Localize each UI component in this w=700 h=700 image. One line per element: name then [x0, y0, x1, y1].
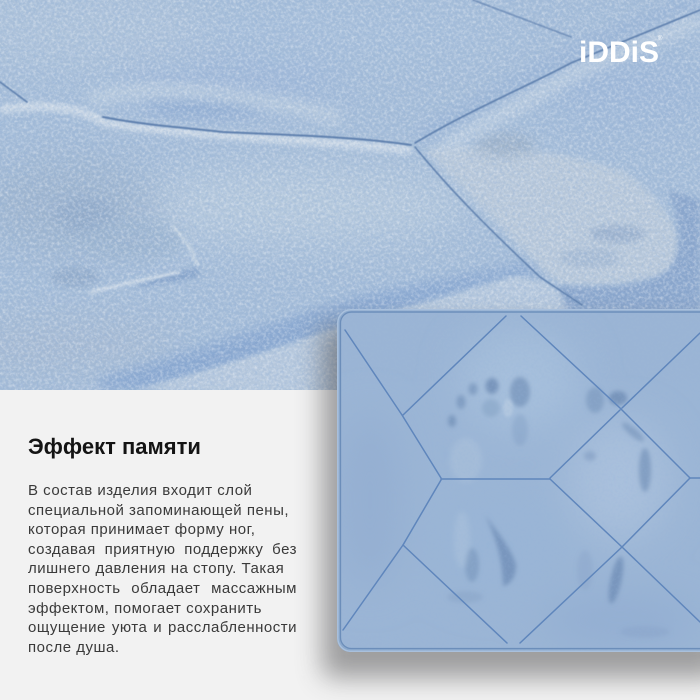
text block: description	[28, 482, 297, 656]
shadow beside foot impression	[558, 190, 700, 320]
heading: Эффект памяти	[28, 434, 201, 459]
light upper ridge	[90, 90, 340, 118]
seams	[0, 0, 700, 305]
lower light panel of plush mat	[140, 275, 566, 390]
text block: description: поверхность обладает массажным	[28, 580, 297, 597]
foot highlights	[454, 442, 478, 478]
right foot impression	[425, 146, 679, 286]
text block: description: специальной запоминающей пены,	[28, 502, 289, 519]
mat drop shadow	[322, 326, 700, 678]
left foot impression	[62, 202, 108, 228]
mat piped border	[340, 312, 700, 648]
text block: description: ощущение уюта и расслабленности	[28, 619, 297, 636]
text block: description: после душа.	[28, 639, 120, 656]
logo: IDDIS: iDDiS	[579, 36, 659, 69]
dark patch above seam	[156, 101, 246, 116]
logo: IDDIS: ®	[658, 36, 662, 42]
plush texture	[0, 0, 700, 390]
mat texture	[337, 309, 700, 652]
panel: plush close-up photo	[0, 0, 700, 395]
text block: description: создавая приятную поддержку без	[28, 541, 297, 558]
footprints	[447, 376, 652, 604]
mat quilted seams	[343, 316, 700, 643]
panel: bath mat with footprints	[337, 309, 700, 652]
text block: description: эффектом, помогает сохранить	[28, 600, 262, 617]
text block: description: В состав изделия входит слой	[28, 482, 252, 499]
light edge of padded cell	[0, 106, 411, 150]
dark band below the foot cell	[100, 262, 540, 390]
text block: description: лишнего давления на стопу. Такая	[28, 560, 284, 577]
text block: description: которая принимает форму ног,	[28, 521, 255, 538]
